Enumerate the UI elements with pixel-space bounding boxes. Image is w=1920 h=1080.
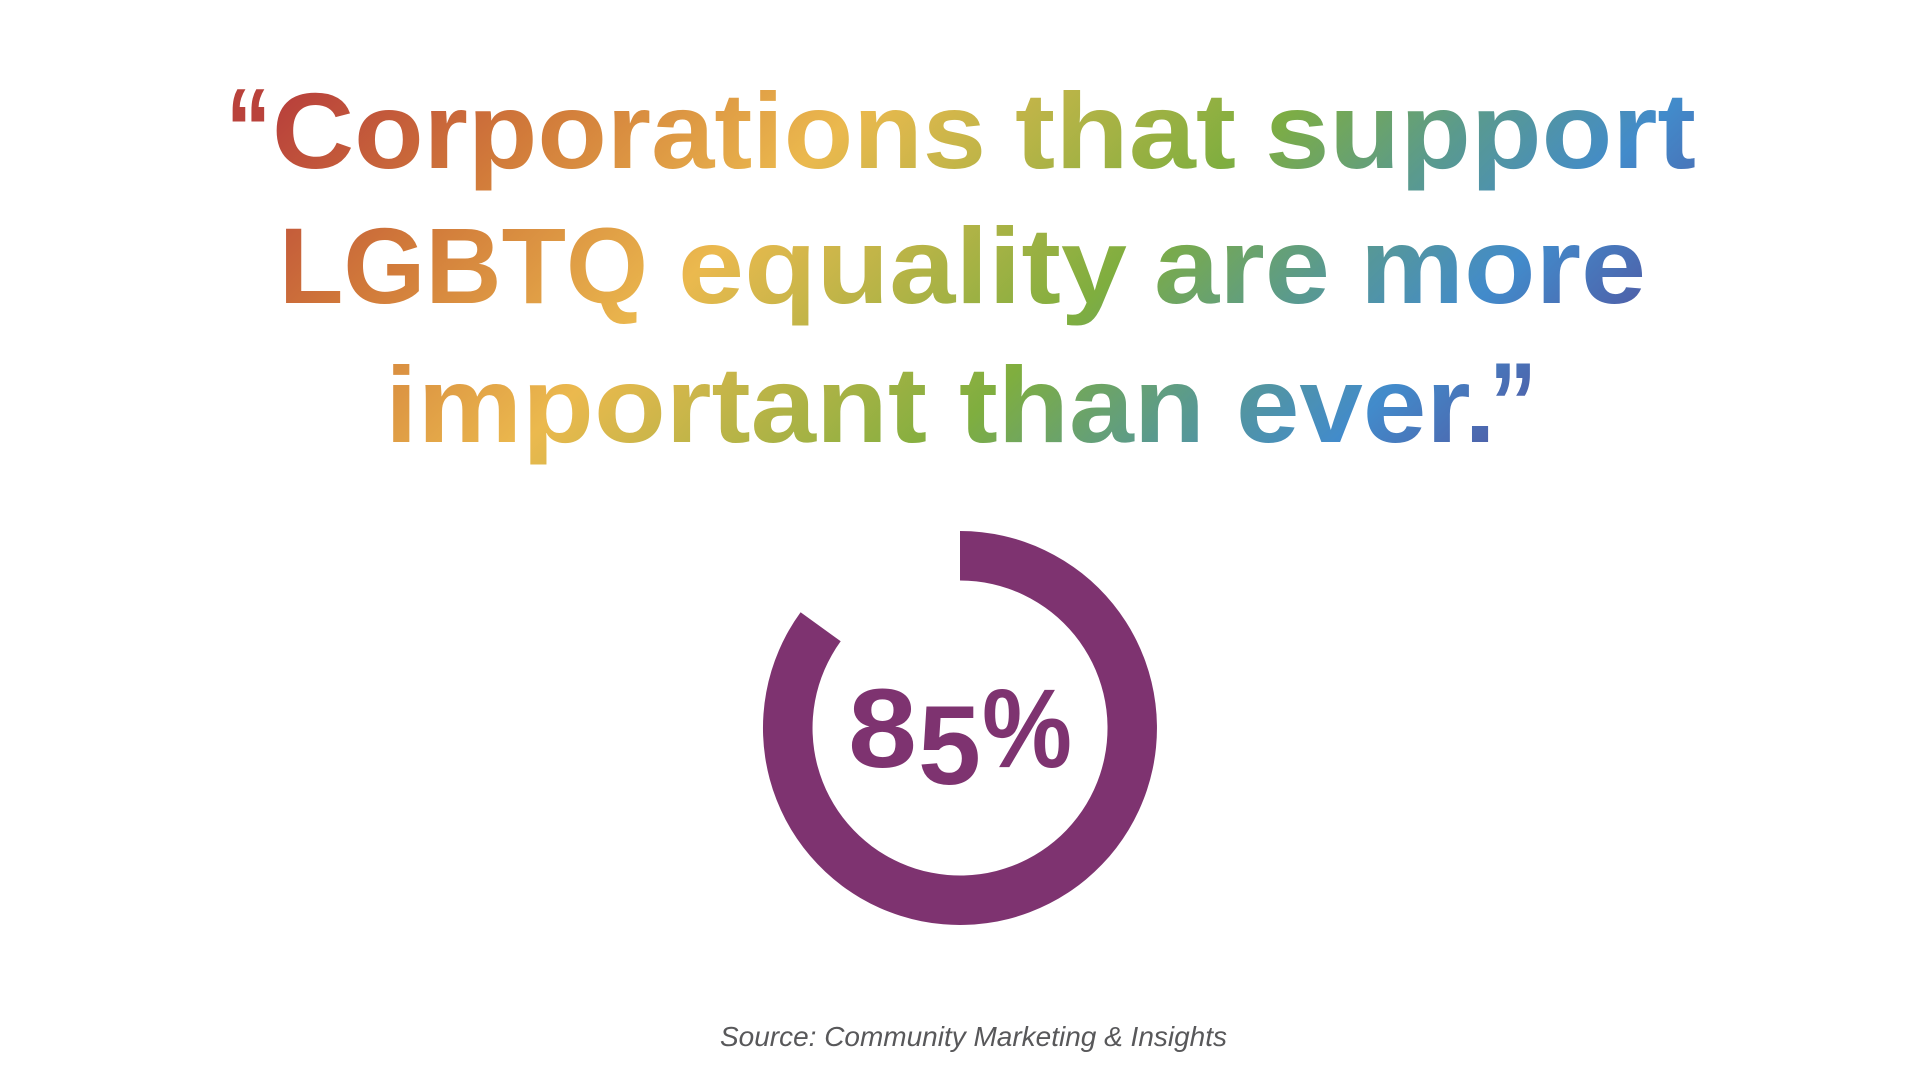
heading line 2: LGBTQ [279,205,648,326]
heading line 3 [385,340,1537,467]
heading line 3: than [959,344,1205,465]
heading line 1 [226,66,1696,193]
heading line 3: ” [1489,340,1537,467]
heading line 1: that [1015,70,1236,191]
source note: Source: Community Marketing & Insights [720,1021,1227,1052]
donut value label [848,666,1072,808]
heading line 2: more [1360,205,1646,326]
heading line 1: Corporations [272,70,986,191]
donut value label: 8 [848,666,917,791]
heading line 3: ever. [1236,344,1496,465]
donut chart: 85% [763,531,1157,925]
heading line 2 [279,205,1646,326]
heading line 1: “ [226,66,271,193]
donut value label: 5 [918,683,981,808]
heading line 2: are [1154,205,1330,326]
heading line 2: equality [678,205,1127,326]
heading line 1: support [1265,70,1696,191]
heading: rainbow quote [226,66,1696,467]
donut ring arc [763,531,1157,925]
donut value label: % [982,666,1072,791]
heading line 3: important [385,344,927,465]
